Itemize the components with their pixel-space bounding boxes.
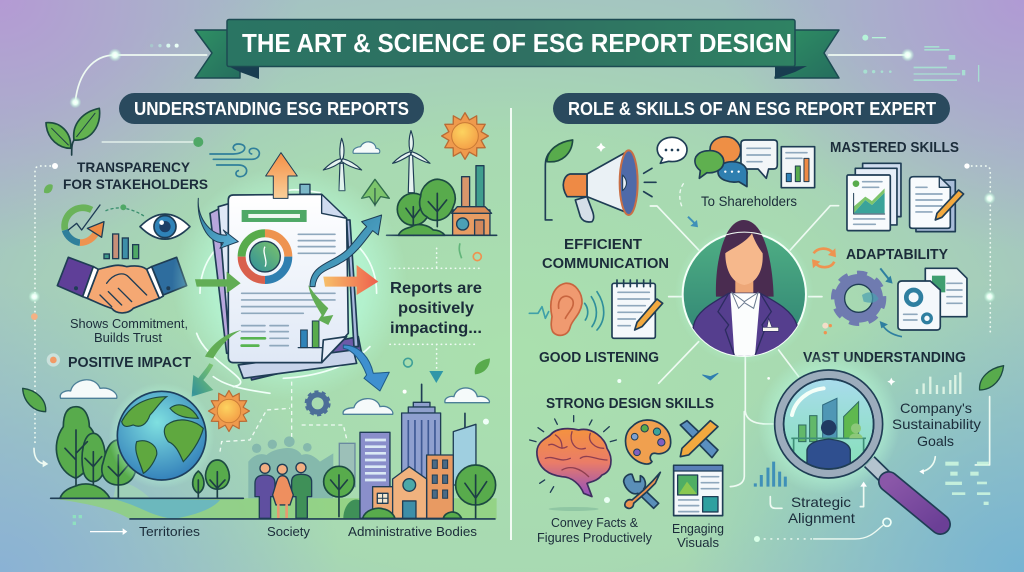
town hall [373, 467, 427, 518]
icon: ear and sound waves [529, 283, 604, 335]
check tick [703, 373, 718, 380]
decorative glow lines, top right [829, 35, 979, 82]
icon: gear and documents [822, 268, 967, 337]
divider between the two halves [510, 108, 512, 540]
arrow: orange up [266, 153, 297, 198]
orange block [427, 455, 453, 518]
icon: brain [530, 416, 616, 511]
lens [784, 379, 874, 469]
bottom page curl [322, 337, 347, 363]
caption: engaging visuals: Visuals [677, 536, 719, 550]
caption: convey facts and figures: Convey Facts & [551, 516, 639, 530]
banner right tail [775, 30, 839, 79]
section heading: understanding ESG reports: UNDERSTANDING ESG REPORTS [134, 99, 409, 119]
heading: positive impact: POSITIVE IMPACT [68, 354, 191, 371]
title: THE ART & SCIENCE OF ESG REPORT DESIGN [242, 28, 792, 58]
caption: company's sustainability goals: Company's [900, 400, 972, 416]
caption: shows commitment [70, 316, 188, 345]
arrow: blue curved in [198, 198, 238, 248]
heading: transparency for stakeholders [63, 159, 208, 192]
callout: reports are positively impacting [390, 280, 482, 337]
small charts, leaf and decorations [754, 366, 1004, 542]
icon: handshake [57, 257, 187, 313]
arrow: blue down right [343, 345, 389, 391]
scene [799, 425, 806, 442]
dashed connector lines [220, 382, 347, 452]
people [255, 463, 312, 518]
icon: leaf sprig [46, 108, 203, 155]
section heading: role and skills [553, 93, 950, 124]
connector lines around the expert [650, 163, 996, 487]
caption: shows commitment: Builds Trust [94, 330, 162, 345]
caption: strategic alignment: Alignment [788, 510, 855, 526]
lapels [718, 293, 771, 360]
caption labels under the scene [139, 524, 478, 539]
callout: reports are positively impacting: impacting... [390, 320, 482, 337]
heading: efficient communication: COMMUNICATION [542, 256, 669, 272]
label: to shareholders: To Shareholders [701, 194, 797, 209]
icon: donut chart with arrow [65, 204, 144, 243]
heading: good listening: GOOD LISTENING [539, 350, 659, 366]
icon: wind [210, 144, 259, 177]
design skill icons [530, 373, 723, 516]
jacket [692, 292, 798, 356]
caption labels under the scene: Territories [139, 524, 201, 539]
icon: sun [208, 390, 250, 432]
text lines [242, 234, 335, 346]
dotted connector, left edge [28, 163, 60, 467]
lens highlight [792, 388, 824, 415]
faded building [339, 443, 355, 487]
heading: transparency for stakeholders: TRANSPARENCY [77, 159, 191, 175]
trees left [56, 407, 136, 498]
icon: bars [104, 234, 139, 259]
concentric glow arcs [197, 190, 377, 393]
small arrow and squares [73, 515, 127, 535]
people silhouettes [248, 436, 333, 498]
caption: company's sustainability goals: Sustainability [892, 416, 981, 432]
caption labels under the scene: Administrative Bodies [348, 524, 478, 539]
decorations, upper right of left panel [390, 243, 483, 268]
handle [869, 462, 940, 524]
caption: strategic alignment: Strategic [791, 494, 851, 510]
ground [51, 482, 497, 519]
icon: trees and factory [362, 166, 497, 235]
hair front [716, 232, 774, 297]
icon: gear [306, 392, 329, 415]
icon: pencil and ruler [680, 421, 718, 458]
bushes and tree [363, 465, 496, 518]
neck [735, 280, 754, 293]
decorations, lower right of left panel [390, 344, 490, 425]
heading: efficient communication [542, 237, 669, 272]
section heading: understanding ESG reports [119, 93, 424, 124]
icon: documents and pencil [847, 163, 964, 232]
heading text: ADAPTABILITY [846, 247, 948, 263]
icon: sync arrows [812, 248, 836, 268]
heading: efficient communication: EFFICIENT [564, 237, 642, 253]
icon: clouds [343, 388, 489, 414]
small bars [298, 321, 325, 348]
folded corner [322, 194, 347, 218]
report document [210, 184, 362, 380]
arrows out of the document [192, 153, 389, 397]
arrow: green in [195, 272, 241, 293]
icon: wind turbines [323, 131, 430, 193]
icon: web page layout [674, 465, 723, 516]
document glow [172, 165, 408, 401]
main page [228, 194, 348, 363]
section heading: role and skills: ROLE & SKILLS OF AN ESG REPORT EXPERT [568, 99, 936, 119]
callout: reports are positively impacting: Reports are [390, 280, 482, 297]
face [725, 233, 763, 285]
icon: globe [108, 382, 215, 489]
icon: eye [140, 214, 190, 239]
pie chart [242, 233, 288, 280]
clip tab [300, 184, 310, 194]
caption: engaging visuals [672, 522, 724, 550]
icon: speech bubble [657, 137, 687, 163]
heading: vast understanding: VAST UNDERSTANDING [803, 350, 966, 366]
caption: convey facts and figures [537, 516, 653, 545]
written page [910, 177, 964, 232]
back pages [210, 203, 362, 380]
title banner [195, 20, 839, 79]
expert portrait [674, 220, 814, 364]
icon: notepad and pencil [612, 280, 663, 338]
header bar [242, 210, 307, 222]
scene: landscape and city [23, 380, 497, 535]
caption: company's sustainability goals [892, 400, 981, 449]
pin [763, 318, 779, 331]
tree by the city [324, 466, 362, 518]
arrow: orange right [323, 265, 378, 295]
decorative glow lines, top left [69, 44, 207, 108]
caption: convey facts and figures: Figures Productively [537, 531, 653, 545]
panel: understanding ESG reports [23, 108, 497, 539]
shirt [730, 293, 760, 360]
panel: role and skills [529, 137, 1004, 550]
caption: company's sustainability goals: Goals [917, 433, 954, 449]
caption labels under the scene: Society [267, 524, 310, 539]
icon: leaf [23, 388, 46, 412]
baseline [130, 516, 495, 521]
heading: mastered skills: MASTERED SKILLS [830, 140, 959, 156]
stacked chart report [847, 163, 901, 231]
caption: engaging visuals: Engaging [672, 522, 724, 536]
heading: transparency for stakeholders: FOR STAKEHOLDERS [63, 176, 208, 192]
heading: strong design skills: STRONG DESIGN SKILLS [546, 396, 714, 412]
arrow: green down [308, 285, 333, 325]
arrow: green curved down left [205, 330, 242, 358]
tower [402, 384, 441, 486]
hair [715, 220, 774, 295]
icon: megaphone [545, 140, 656, 222]
banner left tail [195, 30, 259, 79]
buildings [360, 384, 496, 518]
caption: shows commitment: Shows Commitment, [70, 316, 188, 331]
arrow: blue rising [310, 215, 382, 287]
striped block [360, 432, 390, 518]
icon: chat bubbles and report card [680, 137, 815, 227]
icon: palette [626, 420, 671, 464]
glass building [453, 413, 476, 485]
heading: adaptability with sync arrows [812, 247, 948, 268]
icon: magnifying glass with business scene [757, 352, 940, 524]
icon: sun [442, 113, 488, 159]
icon: cloud [60, 380, 117, 398]
callout: reports are positively impacting: positively [398, 300, 474, 317]
small trees [51, 460, 243, 498]
banner body [227, 20, 795, 66]
caption: strategic alignment [788, 494, 855, 526]
icon: wrench and screwdriver [624, 472, 660, 508]
icon: small cloud [353, 142, 380, 153]
